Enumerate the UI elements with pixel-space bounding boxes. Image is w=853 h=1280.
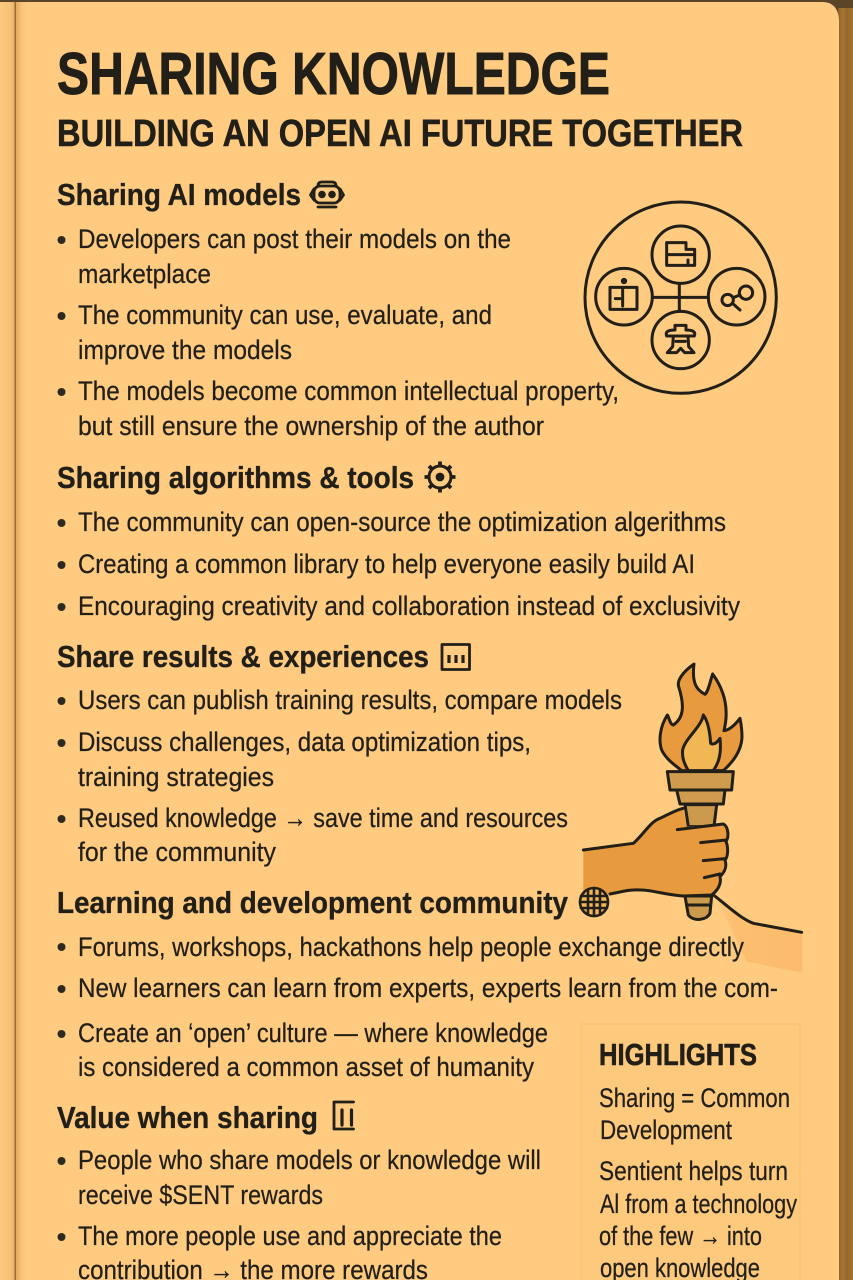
bullet list: learning and development: Forums, workshops, hackathons help people exchange directly <box>78 932 744 962</box>
icon: pillar box <box>334 1102 354 1129</box>
bullet list: algorithms and tools: Encouraging creativity and collaboration instead of exclusivity <box>78 591 740 621</box>
icon: robot <box>310 182 344 207</box>
highlights text: sentient <box>599 1156 797 1280</box>
subtitle: BUILDING AN OPEN AI FUTURE TOGETHER <box>57 113 743 155</box>
bullet list: learning and development: is considered a common asset of humanity <box>78 1052 534 1082</box>
heading: share results and experiences: Share results & experiences <box>57 639 429 674</box>
bullet list: sharing AI models: The community can use, evaluate, and <box>78 300 492 330</box>
bullet list: algorithms and tools: The community can open-source the optimization algerithms <box>78 507 726 537</box>
highlights text: sharing: Sharing = Common <box>599 1083 790 1113</box>
bullet list: learning and development: Create an ‘open’ culture — where knowledge <box>78 1018 548 1048</box>
icon: gear <box>424 462 456 492</box>
diagram: network of four icons in a circle <box>585 202 776 393</box>
highlights heading: HIGHLIGHTS <box>599 1037 757 1072</box>
highlights text: sharing <box>599 1083 790 1145</box>
bullet list: value when sharing: People who share models or knowledge will <box>78 1145 541 1175</box>
panel: sharing algorithms and tools <box>57 460 740 621</box>
bullet list: results and experiences <box>58 685 622 867</box>
bullet list: learning and development: New learners can learn from experts, experts learn from the com- <box>78 973 778 1003</box>
heading: value when sharing: Value when sharing <box>57 1100 318 1135</box>
highlights text: sharing: Development <box>600 1115 732 1145</box>
bullet list: value when sharing: The more people use and appreciate the <box>78 1221 502 1251</box>
highlights text: sentient: Sentient helps turn <box>599 1156 788 1186</box>
bullet list: sharing AI models: Developers can post their models on the <box>78 224 511 254</box>
bullet list: algorithms and tools: Creating a common library to help everyone easily build AI <box>78 549 695 579</box>
panel: value when sharing <box>57 1100 541 1280</box>
panel: highlights <box>581 1024 800 1280</box>
title: SHARING KNOWLEDGE <box>57 41 610 107</box>
illustration: hand holding torch <box>583 664 802 973</box>
highlights text: sentient: Al from a technology <box>600 1189 797 1219</box>
bullet list: sharing AI models <box>58 224 619 441</box>
heading: sharing AI models: Sharing AI models <box>57 177 301 212</box>
bullet list: sharing AI models: marketplace <box>78 259 211 289</box>
panel: learning and development community <box>57 885 778 1082</box>
bullet list: results and experiences: for the community <box>78 837 276 867</box>
icon: globe <box>580 888 608 916</box>
panel: sharing AI models <box>57 177 619 441</box>
bullet list: results and experiences: training strategies <box>78 762 274 792</box>
panel: share results and experiences <box>57 639 622 867</box>
heading: learning and development community: Learning and development community <box>57 885 569 920</box>
bullet list: algorithms and tools <box>58 507 740 621</box>
bullet list: sharing AI models: improve the models <box>78 335 292 365</box>
bullet list: results and experiences: Discuss challenges, data optimization tips, <box>78 727 531 757</box>
icon: bar chart box <box>442 644 470 670</box>
bullet list: results and experiences: Users can publish training results, compare models <box>78 685 622 715</box>
highlights text: sentient: of the few → into <box>599 1221 762 1251</box>
bullet list: sharing AI models: The models become common intellectual property, <box>78 376 619 406</box>
bullet list: learning and development <box>58 932 778 1082</box>
heading: sharing algorithms and tools: Sharing algorithms & tools <box>57 460 414 495</box>
bullet list: results and experiences: Reused knowledge → save time and resources <box>78 803 568 833</box>
bullet list: value when sharing: receive $SENT rewards <box>78 1180 323 1210</box>
bullet list: sharing AI models: but still ensure the ownership of the author <box>78 411 544 441</box>
bullet list: value when sharing <box>58 1145 541 1280</box>
